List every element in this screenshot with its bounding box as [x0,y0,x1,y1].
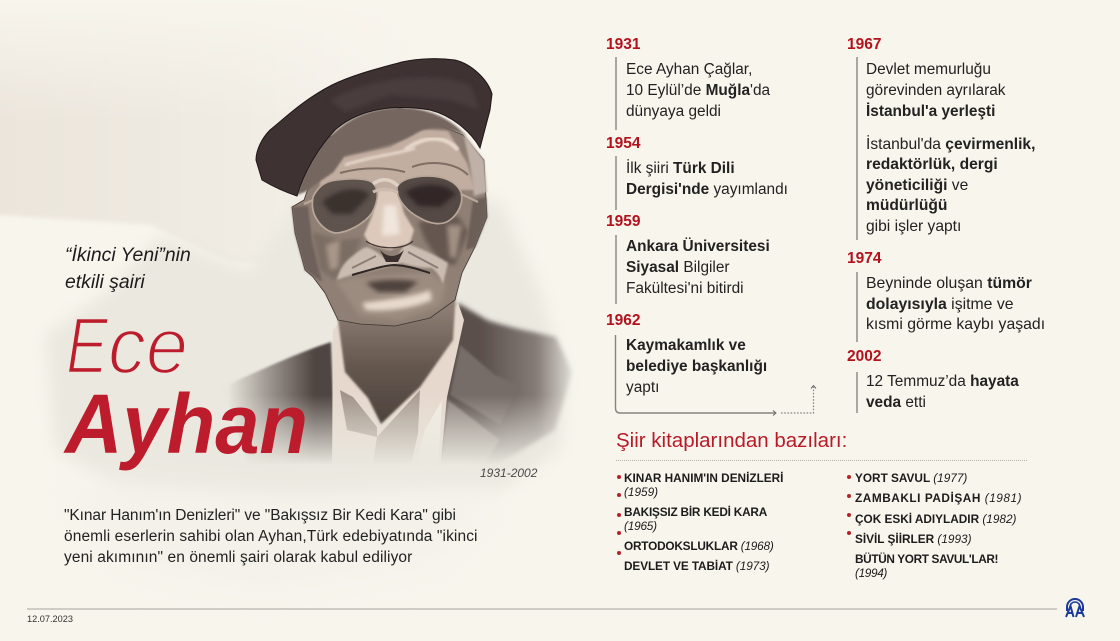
books heading: Şiir kitaplarından bazıları: [616,429,847,452]
icon: AA logo [1065,598,1085,618]
entry 1931 [606,36,770,130]
entry 1967: görevinden ayrılarak [866,82,1005,99]
entry 1967 [847,36,1035,240]
entry 1962: Kaymakamlık ve [626,337,746,354]
entry 1959 [606,213,770,304]
entry 1931: 1931 [606,36,640,53]
surname: Ayhan [63,377,308,471]
entry 1974: 1974 [847,250,881,267]
ears [466,197,487,250]
hair [463,132,487,196]
entry 2002: 12 Temmuz’da hayata [866,373,1019,390]
entry 1974: Beyninde oluşan tümör [866,275,1032,292]
summary paragraph: önemli eserlerin sahibi olan Ayhan,Türk edebiyatında "ikinci [64,528,478,545]
jacket and shirt [223,303,572,470]
entry 1954 [606,135,788,210]
entry 1959: Siyasal Bilgiler [626,259,730,276]
book list left: KINAR HANIM'IN DENİZLERİ [624,471,783,485]
left lens [312,179,377,233]
entry 1954: 1954 [606,135,640,152]
book list right: YORT SAVUL (1977) [855,471,967,485]
entry 1959: Fakültesi'ni bitirdi [626,280,744,297]
entry 2002: 2002 [847,348,881,365]
beret [256,59,492,196]
entry 1954: Dergisi'nde yayımlandı [626,181,788,198]
book list left [617,471,783,573]
entry 1967: 1967 [847,36,881,53]
entry 1967: İstanbul'da çevirmenlik, [866,136,1035,153]
name title [63,301,308,471]
entry 1931: Ece Ayhan Çağlar, [626,61,752,78]
subtitle: “İkinci Yeni”nin [65,244,191,266]
arrow: career path [614,335,816,416]
entry 1974: dolayısıyla işitme ve [866,296,1014,312]
sunglasses [304,176,478,233]
entry 1962: 1962 [606,312,640,329]
first name: E [66,301,109,390]
timeline right column [847,36,1045,413]
entry 1967: Devlet memurluğu [866,61,991,78]
entry 1931: 10 Eylül’de Muğla'da [626,82,770,99]
shirt [332,303,464,470]
life dates: 1931-2002 [480,466,537,480]
subtitle: etkili şairi [65,271,145,293]
book list left: BAKIŞSIZ BİR KEDİ KARA [624,505,767,519]
summary paragraph: "Kınar Hanım'ın Denizleri" ve "Bakışsız Bir Kedi Kara" gibi [64,507,456,524]
entry 1959: 1959 [606,213,640,230]
entry 1967: müdürlüğü [866,197,947,214]
entry 2002 [847,348,1019,413]
entry 1962: belediye başkanlığı [626,358,767,375]
forehead shadow under beret [297,107,466,195]
summary paragraph [64,507,478,566]
entry 1962 [606,312,816,416]
book list right: SİVİL ŞİİRLER (1993) [855,532,972,546]
footer rule [27,608,1057,610]
first name [66,301,188,390]
entry 1959: Ankara Üniversitesi [626,238,770,255]
entry 2002: veda etti [866,394,926,411]
beard and chin [336,272,446,320]
book list left: ORTODOKSLUKLAR (1968) [624,539,774,553]
nose [364,190,414,250]
book list right: BÜTÜN YORT SAVUL'LAR! [855,552,998,566]
entry 1954: İlk şiiri Türk Dili [626,160,735,177]
first name: ce [108,301,188,390]
head [292,108,487,326]
portrait of Ece Ayhan [231,58,572,462]
entry 1967: yöneticiliği ve [866,177,968,194]
book list right [847,471,1022,580]
book list left: (1965) [624,519,657,533]
neck [338,290,456,424]
book list right: ÇOK ESKİ ADIYLADIR (1982) [855,512,1016,526]
entry 1931: dünyaya geldi [626,103,721,120]
right lens [397,176,462,224]
book list right: (1994) [855,566,887,580]
entry 1967: İstanbul'a yerleşti [866,103,995,120]
cheeks [312,232,362,280]
subtitle [65,244,191,293]
entry 1967: gibi işler yaptı [866,218,961,235]
book list left: (1959) [624,485,658,499]
book list left: DEVLET VE TABİAT (1973) [624,559,769,573]
book list right: ZAMBAKLI PADİŞAH (1981) [855,491,1022,505]
moustache [337,243,448,284]
forehead [320,129,475,190]
timeline left column [606,36,816,416]
entry 1974: kısmi görme kaybı yaşadı [866,316,1045,333]
entry 1974 [847,250,1045,342]
entry 1962: yaptı [626,379,659,396]
summary paragraph: yeni akımının" en önemli şairi olarak kabul ediliyor [64,549,412,566]
date: 12.07.2023 [27,614,73,624]
entry 1967: redaktörlük, dergi [866,156,998,173]
